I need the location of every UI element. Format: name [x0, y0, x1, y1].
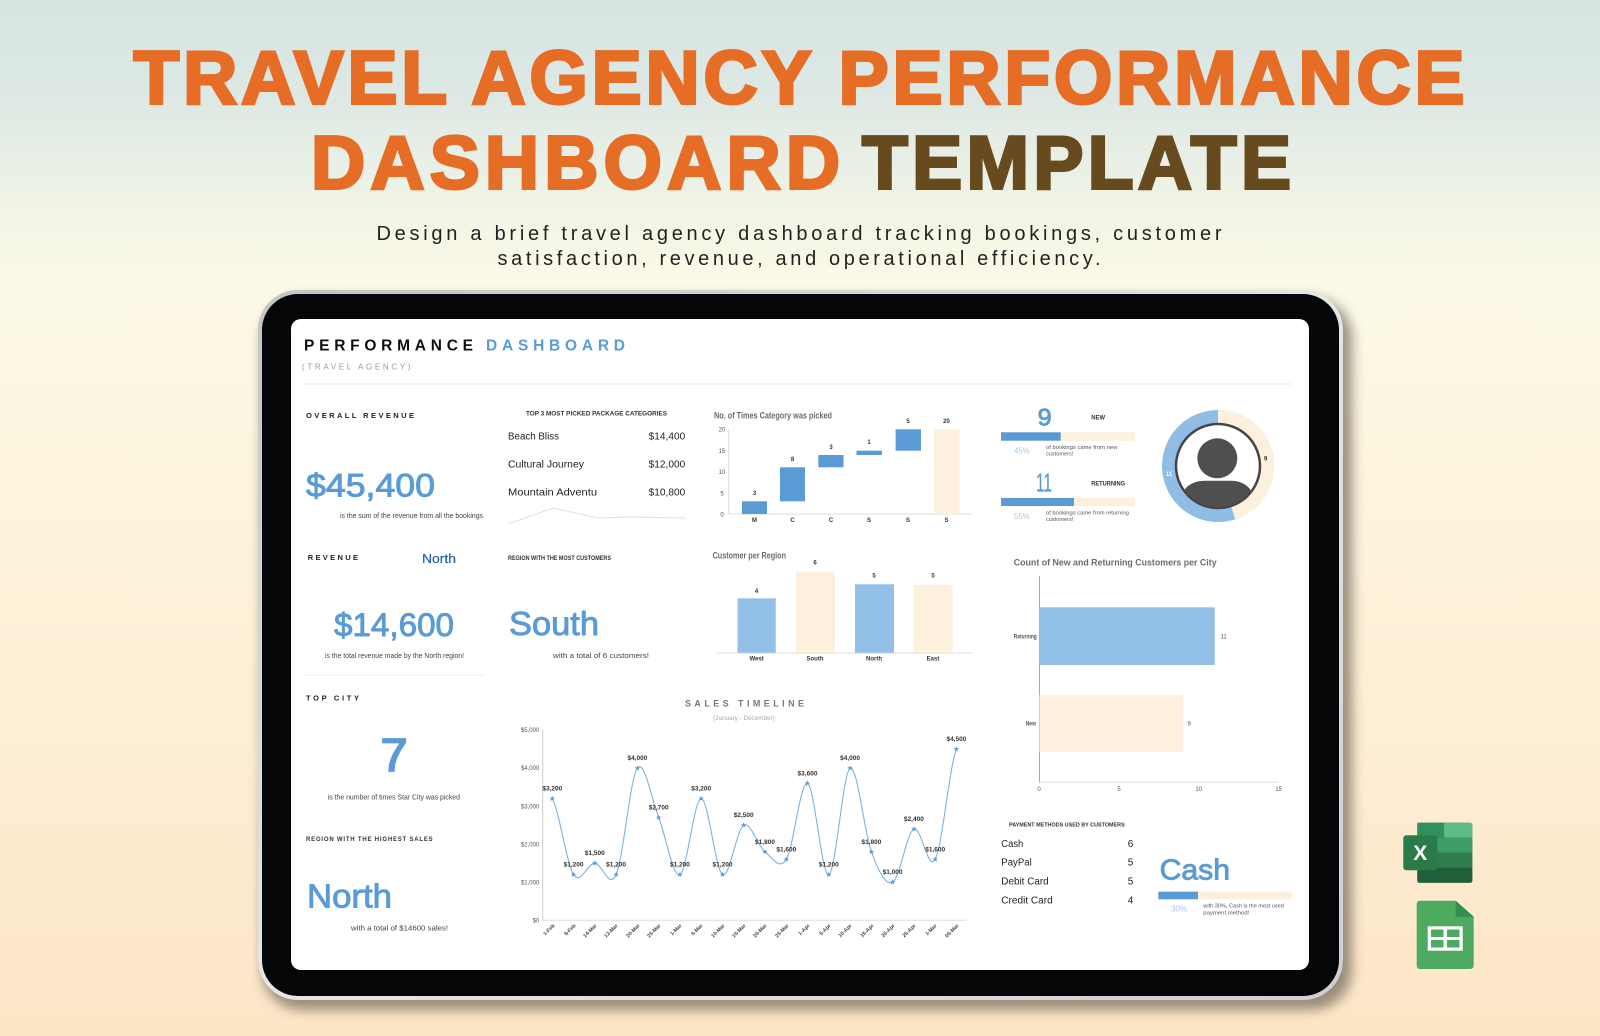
x axis date labels: 05-Mar: [944, 923, 960, 939]
bar values: [1188, 634, 1227, 728]
donut label: new: 9: [1264, 456, 1268, 462]
chart title: Customer per Region: [713, 551, 786, 562]
row: cultural journey: $12,000: [649, 460, 686, 471]
value: 7: [381, 729, 408, 781]
data labels: $1,500: [585, 850, 605, 857]
new customers: 45%: [1014, 446, 1030, 455]
x axis date labels: 1-Mar: [924, 923, 938, 937]
data labels: $1,200: [670, 862, 690, 869]
sparkline: [508, 508, 686, 524]
avatar head: [1197, 438, 1237, 478]
y axis ticks: [719, 428, 726, 518]
value: South: [509, 605, 599, 642]
row: beach bliss: Beach Bliss: [508, 431, 559, 442]
icon: excel: [1403, 823, 1472, 883]
row: debit card: [1001, 877, 1134, 888]
waterfall bars: [742, 429, 921, 514]
label: OVERALL REVENUE: [306, 411, 414, 420]
value labels: 3: [753, 491, 757, 497]
category labels: New: [1026, 722, 1036, 728]
x axis ticks: [1037, 787, 1283, 793]
panel: new and returning customers: [1001, 405, 1135, 523]
description: with a total of $14600 sales!: [350, 926, 448, 933]
panel: overall revenue: [306, 411, 483, 520]
data labels: $2,500: [734, 812, 754, 819]
value labels: 20: [943, 419, 950, 425]
progress track: [1158, 892, 1292, 899]
category labels: Returning: [1014, 634, 1037, 640]
chart: new and returning customers per city: [1014, 558, 1283, 793]
heading word: dashboard: DASHBOARD: [486, 338, 625, 354]
x axis date labels: 20-Apr: [881, 923, 896, 939]
subtitle: [376, 223, 1222, 270]
bar: west: [738, 598, 776, 653]
x axis labels: C: [829, 518, 834, 524]
x axis date labels: 10-Mar: [710, 923, 726, 939]
panel: region with highest sales: [306, 837, 448, 933]
heading subtitle: (TRAVEL AGENCY): [302, 362, 411, 371]
returning customers: customers!: [1046, 517, 1074, 523]
x axis labels: S: [867, 518, 871, 524]
x axis ticks: 10: [1195, 787, 1203, 793]
data labels: $1,000: [883, 869, 903, 876]
x axis date labels: 14-Mar: [582, 923, 598, 939]
returning customers: of bookings came from returning: [1046, 511, 1129, 517]
value: Cash: [1160, 854, 1230, 886]
region labels: West: [749, 656, 764, 662]
x axis labels: M: [752, 518, 757, 524]
tablet rim: [258, 290, 1343, 1000]
bar values: [755, 560, 935, 595]
y axis ticks: [521, 728, 540, 924]
data labels: $1,600: [776, 846, 797, 853]
bar values: 4: [755, 589, 759, 595]
x axis date labels: 25-Apr: [902, 923, 917, 939]
row: mountain adventure: [508, 488, 686, 499]
data labels: $1,200: [606, 862, 626, 869]
label: REVENUE: [308, 553, 358, 562]
donut label: returning: 11: [1166, 472, 1173, 478]
data point markers: [550, 746, 959, 885]
x axis ticks: 5: [1117, 787, 1121, 793]
row: beach bliss: $14,400: [649, 431, 686, 442]
returning customers: 55%: [1014, 512, 1030, 521]
description line 2: payment method!: [1203, 910, 1250, 916]
value: $45,400: [306, 468, 435, 504]
data labels: $2,700: [649, 804, 669, 812]
x axis date labels: 8-Feb: [563, 923, 577, 937]
data labels: $4,500: [946, 736, 967, 743]
x axis ticks: 15: [1275, 787, 1283, 793]
y axis ticks: $4,000: [521, 766, 540, 772]
chart subtitle: (January - December): [713, 716, 775, 722]
row: debit card: 5: [1128, 877, 1134, 888]
data labels: $1,800: [755, 839, 775, 846]
tablet body: [262, 294, 1339, 996]
tablet device: [258, 290, 1343, 1000]
row: paypal: 5: [1128, 858, 1134, 869]
y axis ticks: $2,000: [521, 842, 540, 848]
x axis date labels: 5-Apr: [819, 923, 832, 937]
x axis labels: [752, 518, 949, 524]
data labels: $1,200: [713, 862, 733, 869]
tablet screen: [291, 319, 1309, 970]
new customers: customers!: [1046, 452, 1074, 458]
value: $14,600: [334, 607, 454, 643]
panel: payment methods: [1001, 823, 1134, 906]
value: North: [307, 878, 392, 914]
data labels: $3,200: [542, 786, 563, 792]
region labels: North: [866, 656, 882, 662]
new customers: NEW: [1091, 415, 1105, 421]
y axis ticks: 20: [719, 428, 726, 434]
value labels: 1: [867, 440, 871, 446]
percent: 30%: [1171, 905, 1187, 914]
x axis date labels: 15-Apr: [860, 923, 875, 939]
x axis date labels: 1-Apr: [798, 923, 811, 937]
x axis date labels: 10-Apr: [838, 923, 853, 939]
avatar ring: [1176, 424, 1260, 508]
donut blue segment: [1169, 417, 1267, 515]
title: [134, 36, 1464, 204]
bar: east: [914, 585, 953, 653]
data labels: $3,600: [798, 770, 818, 777]
row: credit card: Credit Card: [1001, 895, 1053, 906]
icon: google sheets: [1417, 901, 1474, 969]
bar: new: [1040, 695, 1183, 752]
x axis date labels: [542, 923, 960, 939]
data labels: $2,400: [904, 816, 924, 823]
row: paypal: [1001, 858, 1134, 869]
row: cash: [1001, 839, 1134, 850]
x axis date labels: 20-Mar: [625, 923, 641, 939]
new customers: [1001, 405, 1135, 458]
chart: customer donut with avatar: [1166, 417, 1268, 515]
bar values: 9: [1188, 722, 1192, 728]
panel: revenue north: [308, 551, 464, 660]
bar: north: [855, 584, 894, 653]
waterfall total bar: [934, 429, 960, 514]
panel: region with most customers: [508, 556, 649, 660]
y axis ticks: 15: [719, 449, 726, 455]
bar: returning: [1040, 607, 1215, 665]
bar values: 5: [931, 574, 935, 580]
icon: excel: X: [1413, 842, 1427, 865]
description line 1: with 30%, Cash is the most used: [1202, 903, 1284, 909]
row: credit card: [1001, 895, 1134, 906]
dashboard content: [302, 338, 1292, 939]
region labels: South: [806, 656, 824, 662]
label: REGION WITH THE HIGHEST SALES: [306, 837, 433, 843]
region labels: East: [927, 656, 939, 662]
bar: south: [796, 572, 835, 653]
data labels: [542, 736, 967, 876]
value labels: 3: [829, 445, 833, 451]
title word: template: TEMPLATE: [862, 120, 1291, 204]
bar values: 5: [872, 574, 876, 580]
chart title: SALES TIMELINE: [685, 698, 804, 708]
category labels: [1014, 634, 1037, 728]
returning customers: RETURNING: [1091, 481, 1125, 487]
data labels: $1,200: [564, 862, 584, 869]
description: is the sum of the revenue from all the bookings: [340, 513, 483, 520]
heading word: performance: PERFORMANCE: [304, 338, 473, 354]
label: REGION WITH THE MOST CUSTOMERS: [508, 556, 611, 562]
data labels: $1,800: [861, 839, 882, 846]
x axis labels: C: [790, 518, 795, 524]
row: cash: 6: [1128, 839, 1134, 850]
row: cash: Cash: [1001, 839, 1023, 850]
tablet shadow: [262, 298, 1352, 1010]
title line 1: TRAVEL AGENCY PERFORMANCE: [134, 36, 1464, 120]
value labels: 8: [791, 457, 795, 463]
donut cream segment: [1218, 417, 1267, 513]
y axis ticks: 0: [720, 512, 724, 518]
panel: top 3 package categories: [508, 412, 686, 524]
row: mountain adventure: Mountain Adventu: [508, 488, 597, 499]
chart title: No. of Times Category was picked: [714, 411, 832, 422]
row: debit card: Debit Card: [1001, 877, 1049, 888]
chart title: Count of New and Returning Customers per City: [1014, 558, 1217, 569]
value labels: [753, 419, 950, 497]
chart: customer per region: [713, 551, 972, 662]
row: cultural journey: [508, 460, 686, 471]
y axis ticks: 10: [719, 470, 726, 476]
y axis ticks: 5: [720, 492, 724, 498]
subtitle line 2: satisfaction, revenue, and operational efficiency.: [498, 248, 1100, 270]
subtitle line 1: Design a brief travel agency dashboard tracking bookings, customer: [376, 223, 1222, 245]
data labels: $3,200: [691, 786, 712, 792]
new customers: of bookings came from new: [1046, 445, 1118, 451]
label: TOP CITY: [306, 694, 359, 702]
row: cultural journey: Cultural Journey: [508, 460, 584, 471]
progress fill: [1158, 892, 1198, 899]
y axis ticks: $3,000: [521, 804, 540, 810]
dashboard heading: [302, 338, 625, 371]
value labels: 5: [906, 419, 910, 425]
description: with a total of 6 customers!: [552, 653, 649, 660]
returning customers: 11: [1036, 468, 1052, 498]
description: is the number of times Star City was picked: [328, 795, 460, 802]
new customers: 9: [1038, 405, 1052, 432]
row: mountain adventure: $10,800: [649, 488, 686, 499]
region labels: [749, 656, 939, 662]
row: paypal: PayPal: [1001, 858, 1032, 869]
y axis ticks: $0: [533, 918, 540, 924]
x axis date labels: 1-Mar: [669, 923, 683, 937]
y axis ticks: $5,000: [521, 728, 540, 734]
row: beach bliss: [508, 431, 686, 442]
region name: North: [422, 551, 456, 566]
avatar shoulders: [1184, 480, 1250, 507]
x axis date labels: 20-Mar: [752, 923, 768, 939]
panel: top payment cash: [1158, 854, 1292, 916]
bar values: 11: [1220, 634, 1227, 640]
panel: top city: [306, 694, 460, 802]
heading: TOP 3 MOST PICKED PACKAGE CATEGORIES: [526, 412, 667, 418]
x axis date labels: 25-Mar: [646, 923, 662, 939]
x axis labels: S: [944, 518, 949, 524]
data labels: $1,200: [819, 862, 839, 869]
y axis ticks: $1,000: [521, 880, 540, 886]
data labels: $4,000: [840, 755, 860, 762]
data labels: $4,000: [627, 755, 648, 762]
chart: number of times category was picked: [714, 411, 972, 524]
chart: sales timeline: [521, 698, 967, 939]
x axis date labels: 5-Mar: [690, 923, 704, 937]
sales line: [552, 749, 956, 883]
row: credit card: 4: [1128, 895, 1134, 906]
title word: dashboard: DASHBOARD: [311, 120, 840, 204]
x axis labels: S: [906, 518, 910, 524]
x axis date labels: 12-Mar: [603, 923, 619, 939]
x axis ticks: 0: [1037, 787, 1041, 793]
description: is the total revenue made by the North region!: [325, 653, 464, 660]
heading: PAYMENT METHODS USED BY CUSTOMERS: [1009, 823, 1125, 829]
data labels: $1,600: [925, 846, 946, 853]
x axis date labels: 1-Feb: [542, 923, 556, 937]
returning customers: [1001, 468, 1135, 523]
x axis date labels: 15-Mar: [731, 923, 747, 939]
x axis date labels: 25-Mar: [774, 923, 790, 939]
bar values: 6: [813, 560, 817, 566]
